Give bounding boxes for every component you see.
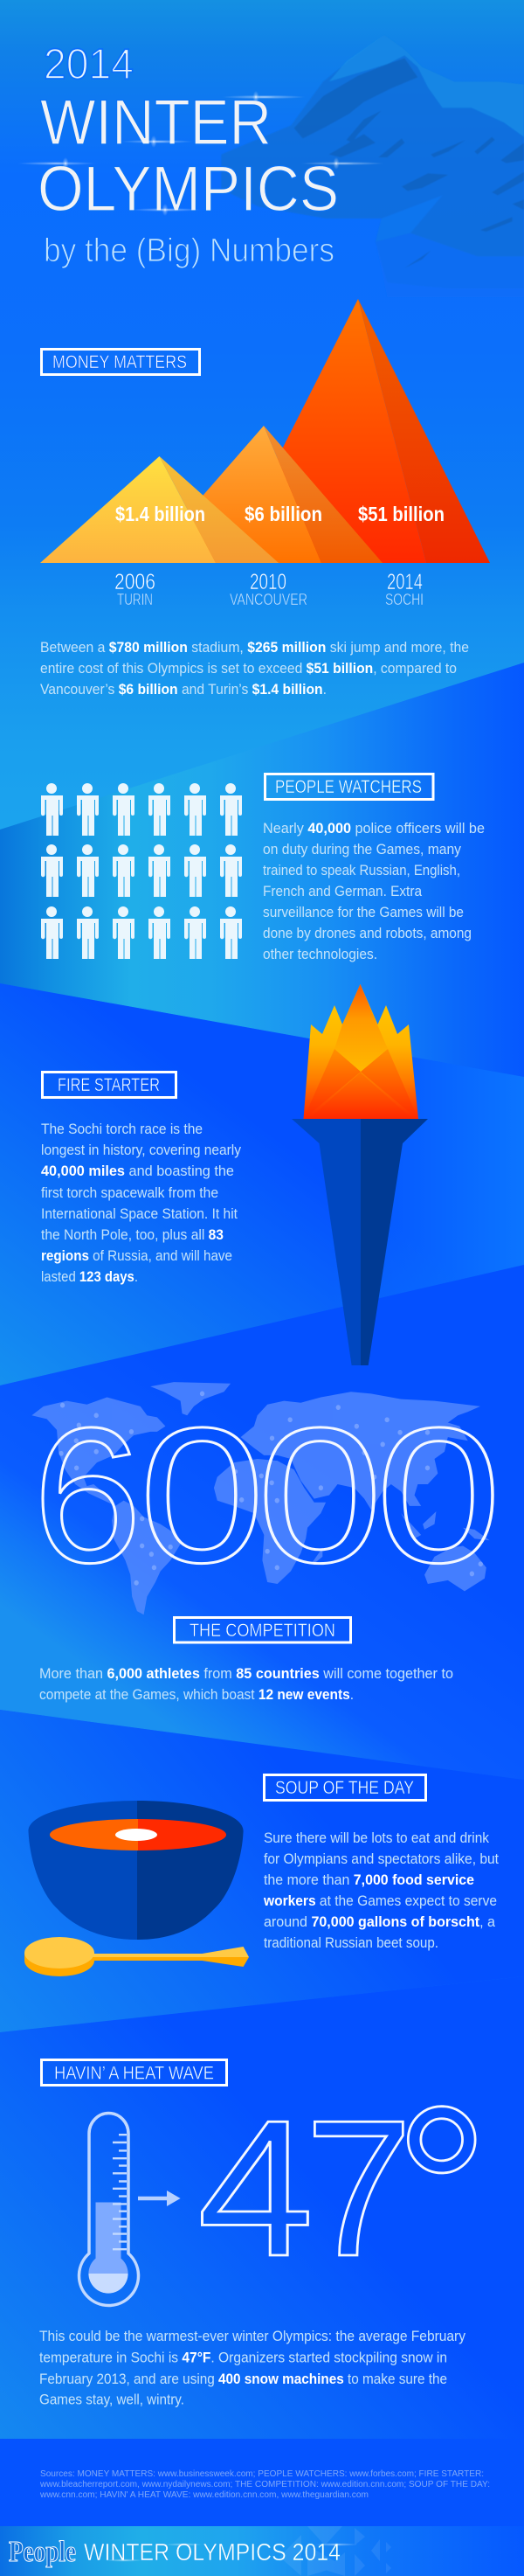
text: soup paragraph: Sure there will be lots to eat and drink — [264, 1830, 489, 1846]
axis labels: years and cities: 2006 — [114, 570, 155, 594]
background: fire starter band — [0, 983, 524, 1385]
text: soup paragraph: for Olympians and spectators alike, but — [264, 1850, 499, 1867]
text: heat wave paragraph: temperature in Sochi is 47°F. Organizers started stockpiling snow in — [39, 2350, 447, 2365]
big number: 47 degrees: 7 — [305, 2080, 412, 2297]
title: OLYMPICS: OLYMPICS — [38, 154, 339, 225]
footer title: WINTER OLYMPICS 2014 — [84, 2538, 341, 2566]
footer band — [0, 2526, 524, 2576]
background: heat wave band — [0, 1976, 524, 2441]
text: competition paragraph — [39, 1665, 453, 1703]
sources: Sources: MONEY MATTERS: www.businessweek.com; PEOPLE WATCHERS: www.forbes.com; FIRE STARTER: — [40, 2469, 484, 2479]
heading box: money matters — [42, 350, 199, 374]
torch handle — [292, 1119, 428, 1365]
value: $6 billion: $6 billion — [245, 503, 322, 525]
text: competition paragraph: More than 6,000 athletes from 85 countries will come together to — [39, 1665, 453, 1682]
background: header and money section — [0, 0, 524, 874]
title sparkles — [17, 91, 384, 216]
text: fire starter paragraph: 40,000 miles and boasting the — [41, 1163, 234, 1179]
big number: 47 degrees: ° — [394, 2058, 490, 2325]
peak: 2010 Vancouver — [144, 426, 383, 563]
People logo: People — [9, 2536, 76, 2568]
text: people watchers paragraph: done by drones and robots, among — [263, 925, 472, 941]
value: $1.4 billion: $1.4 billion — [115, 503, 205, 525]
heading box: soup of the day: SOUP OF THE DAY — [275, 1778, 414, 1798]
text: competition paragraph: compete at the Games, which boast 12 new events. — [39, 1686, 354, 1703]
text: people watchers paragraph: trained to speak Russian, English, — [263, 862, 460, 878]
peak: 2014 Sochi — [224, 299, 490, 563]
big number: 6000: 0 — [257, 1388, 383, 1602]
text: fire starter paragraph: The Sochi torch race is the — [41, 1121, 203, 1137]
text: fire starter paragraph: the North Pole, too, plus all 83 — [41, 1226, 224, 1243]
title: WINTER: WINTER — [40, 87, 272, 158]
background: people watchers band — [0, 663, 524, 1077]
big number: 6000: 0 — [376, 1388, 501, 1602]
text: money matters paragraph: entire cost of this Olympics is set to exceed $51 billion, compared to — [40, 660, 457, 677]
heading box: heat wave: HAVIN’ A HEAT WAVE — [54, 2063, 214, 2084]
axis labels: years and cities — [114, 570, 424, 608]
arrow — [138, 2191, 181, 2206]
axis labels: years and cities: TURIN — [117, 591, 153, 608]
text: fire starter paragraph: first torch spacewalk from the — [41, 1184, 218, 1201]
text: heat wave paragraph: Games stay, well, wintry. — [39, 2392, 184, 2407]
text: money matters paragraph: Between a $780 million stadium, $265 million ski jump and more, the — [40, 639, 469, 656]
text: heat wave paragraph: This could be the warmest-ever winter Olympics: the average February — [39, 2328, 465, 2344]
mountain photo — [221, 35, 524, 297]
mountain chart: olympic costs — [40, 299, 490, 563]
text: soup paragraph: traditional Russian beet soup. — [264, 1934, 438, 1951]
heading box: the competition: THE COMPETITION — [190, 1621, 335, 1641]
background: soup band — [0, 1710, 524, 2032]
text: people watchers paragraph: on duty during the Games, many — [263, 841, 461, 858]
text: money matters paragraph: Vancouver’s $6 billion and Turin’s $1.4 billion. — [40, 681, 327, 698]
text: money matters paragraph — [40, 639, 469, 698]
icon: thermometer — [79, 2114, 138, 2305]
text: people watchers paragraph — [263, 820, 485, 962]
text: people watchers paragraph: Nearly 40,000 police officers will be — [263, 820, 485, 837]
icon grid: rows of police officers — [41, 783, 242, 959]
text: soup paragraph: workers at the Games expect to serve — [263, 1892, 497, 1909]
text: soup paragraph: around 70,000 gallons of borscht, a — [264, 1913, 496, 1930]
heading box: fire starter — [42, 1072, 176, 1098]
world map — [31, 1382, 490, 1614]
text: fire starter paragraph: International Space Station. It hit — [41, 1205, 238, 1222]
big number: 6000: 6 — [33, 1388, 141, 1603]
background: competition band — [0, 1265, 524, 1780]
heading box: fire starter: FIRE STARTER — [58, 1075, 160, 1095]
icon: spoon — [24, 1937, 249, 1976]
heading box: people watchers: PEOPLE WATCHERS — [275, 777, 422, 797]
background: sources band — [0, 2439, 524, 2526]
peak: 2006 Turin — [40, 456, 279, 563]
text: people watchers paragraph: French and German. Extra — [263, 883, 422, 899]
value: $51 billion: $51 billion — [358, 503, 445, 525]
big number: 47 degrees — [197, 2058, 490, 2325]
axis labels: years and cities: 2014 — [387, 570, 423, 594]
text: fire starter paragraph: regions of Russia, and will have — [41, 1247, 232, 1264]
text: heat wave paragraph — [39, 2328, 465, 2407]
text: soup paragraph: the more than 7,000 food service — [264, 1871, 474, 1888]
icon: soup bowl — [28, 1801, 244, 1940]
title: 2014: 2014 — [44, 41, 134, 88]
heading box: soup of the day — [264, 1774, 426, 1801]
big number: 6000: 0 — [139, 1388, 265, 1602]
text: fire starter paragraph: longest in history, covering nearly — [41, 1142, 241, 1158]
axis labels: years and cities: 2010 — [250, 570, 286, 594]
sources: www.cnn.com; HAVIN' A HEAT WAVE: www.edition.cnn.com, www.theguardian.com — [39, 2490, 369, 2500]
sources: www.bleacherreport.com, www.nydailynews.com; THE COMPETITION: www.edition.cnn.com; SOUP OF THE DAY: — [39, 2480, 490, 2489]
text: people watchers paragraph: surveillance for the Games will be — [263, 904, 464, 920]
heading box: money matters: MONEY MATTERS — [52, 352, 187, 372]
text: heat wave paragraph: February 2013, and are using 400 snow machines to make sure the — [39, 2371, 447, 2387]
sources — [39, 2469, 490, 2500]
text: fire starter paragraph: lasted 123 days. — [41, 1268, 138, 1285]
icon: olympic torch — [292, 984, 428, 1365]
big number: 47 degrees: 4 — [197, 2080, 314, 2296]
heading box: people watchers — [265, 774, 433, 799]
text: fire starter paragraph — [41, 1121, 241, 1285]
big number: 6000 — [33, 1388, 501, 1603]
text: soup paragraph — [263, 1830, 499, 1951]
text: people watchers paragraph: other technologies. — [263, 946, 377, 962]
subtitle: by the (Big) Numbers — [44, 233, 334, 269]
axis labels: years and cities: VANCOUVER — [230, 591, 307, 608]
torch flame — [304, 984, 418, 1119]
axis labels: years and cities: SOCHI — [385, 591, 424, 608]
